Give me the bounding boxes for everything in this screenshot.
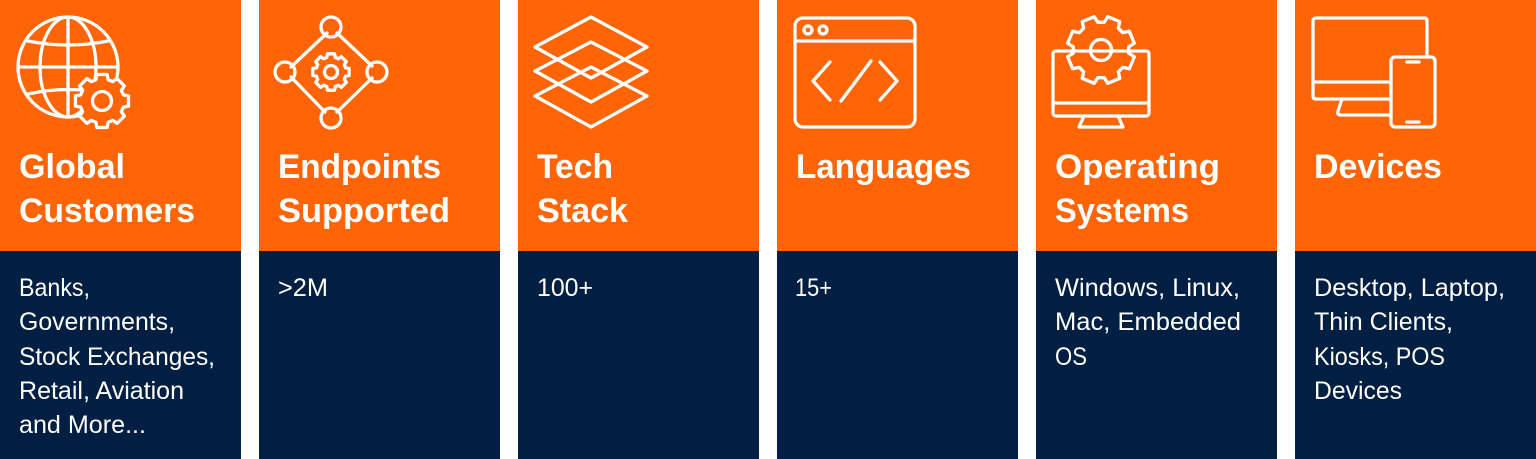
text: operating system list: OS — [1055, 343, 1087, 371]
text: device list: Desktop, Laptop, — [1314, 274, 1505, 302]
text: customer list: and More... — [19, 411, 146, 439]
text: customer list: Banks, — [19, 274, 90, 302]
panel: tech stack — [518, 0, 759, 459]
heading: operating systems — [1055, 148, 1220, 230]
heading: languages: Languages — [796, 148, 971, 186]
text: customer list: Retail, Aviation — [19, 377, 184, 405]
text: endpoint count: >2M — [278, 274, 328, 302]
text: device list — [1314, 274, 1505, 405]
heading: tech stack: Stack — [537, 192, 628, 230]
text: device list: Devices — [1314, 377, 1402, 405]
text: operating system list: Mac, Embedded — [1055, 308, 1241, 336]
heading: tech stack: Tech — [537, 148, 613, 186]
text: device list: Thin Clients, — [1314, 308, 1453, 336]
heading: endpoints supported: Endpoints — [278, 148, 441, 186]
text: operating system list: Windows, Linux, — [1055, 274, 1240, 302]
heading: global customers: Global — [19, 148, 125, 186]
heading: operating systems: Systems — [1055, 192, 1189, 230]
panel: endpoints supported — [259, 0, 500, 459]
heading: endpoints supported — [278, 148, 450, 230]
icon: monitor and phone — [1313, 18, 1435, 127]
heading: global customers — [19, 148, 195, 230]
heading: operating systems: Operating — [1055, 148, 1220, 186]
icon: code window — [795, 18, 915, 127]
icon: globe with gear — [18, 17, 129, 128]
panel: devices — [1295, 0, 1536, 459]
text: customer list: Governments, — [19, 308, 175, 336]
text: customer list — [19, 274, 215, 439]
heading: global customers: Customers — [19, 192, 195, 230]
text: language count: 15+ — [795, 274, 832, 302]
heading: tech stack — [537, 148, 628, 230]
text: tech count: 100+ — [537, 274, 593, 302]
text: customer list: Stock Exchanges, — [19, 343, 215, 371]
panel: languages — [777, 0, 1018, 459]
icon: stacked layers — [535, 17, 647, 127]
heading: devices: Devices — [1314, 148, 1442, 186]
text: operating system list — [1055, 274, 1241, 371]
panel: global customers — [0, 0, 241, 459]
icon: monitor with gear — [1053, 6, 1149, 127]
panel: operating systems — [1036, 0, 1277, 459]
text: device list: Kiosks, POS — [1314, 343, 1445, 371]
heading: endpoints supported: Supported — [278, 192, 450, 230]
icon: network diamond with gear — [275, 17, 387, 128]
